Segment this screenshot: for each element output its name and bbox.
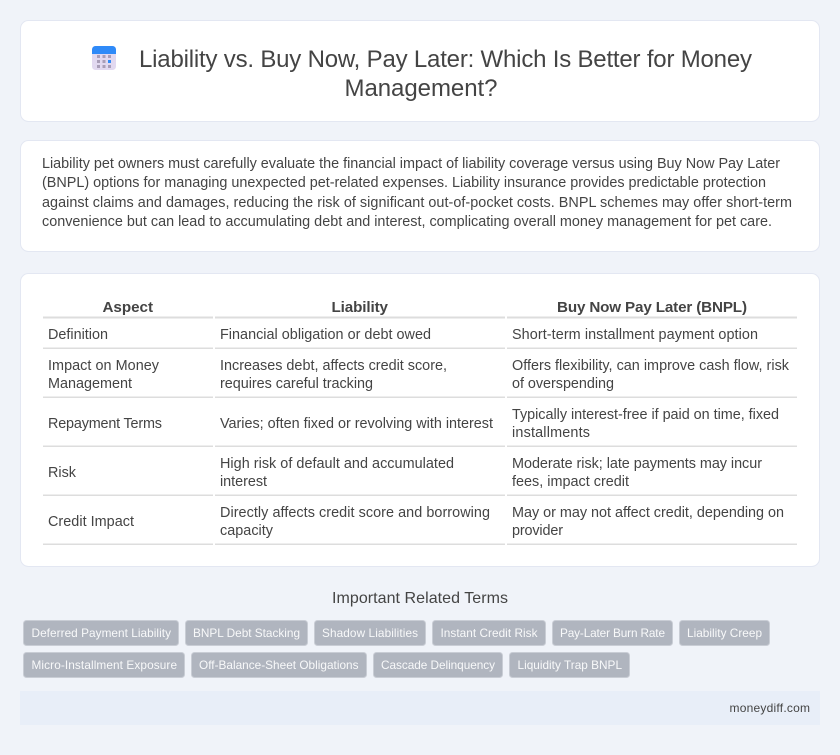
title [139, 46, 752, 102]
row: credit impact: May or may not affect credit, depending on [512, 505, 784, 521]
row: credit impact: provider [512, 523, 563, 539]
row: definition: Definition [48, 327, 108, 343]
tag: cascade delinquency [374, 652, 502, 678]
row: impact on money management: of overspending [512, 376, 614, 392]
tag: micro-installment exposure [24, 652, 184, 678]
heading: important related terms: Important Related Terms [332, 590, 508, 607]
row: repayment terms: installments [512, 425, 590, 441]
intro text block [42, 156, 792, 230]
footer [20, 691, 820, 725]
row: repayment terms: Repayment Terms [48, 416, 162, 432]
tag: bnpl debt stacking [186, 620, 308, 646]
row: definition [43, 327, 797, 349]
tag: off-balance-sheet obligations [192, 652, 366, 678]
tag: micro-installment exposure: Micro-Installment Exposure [32, 658, 177, 672]
tag: pay-later burn rate [552, 620, 672, 646]
row: risk: Moderate risk; late payments may incur [512, 456, 762, 472]
row: credit impact [43, 505, 797, 545]
row: impact on money management [43, 358, 797, 398]
tag: bnpl debt stacking: BNPL Debt Stacking [193, 626, 300, 640]
title: Management? [344, 75, 498, 102]
tag: shadow liabilities: Shadow Liabilities [322, 626, 418, 640]
tag: liability creep [680, 620, 770, 646]
row: repayment terms: Varies; often fixed or revolving with interest [220, 416, 493, 432]
row: risk [43, 456, 797, 496]
tag: liquidity trap bnpl: Liquidity Trap BNPL [518, 658, 622, 672]
tag: liability creep: Liability Creep [687, 626, 762, 640]
tag: instant credit risk [432, 620, 546, 646]
row: impact on money management: Offers flexibility, can improve cash flow, risk [512, 358, 790, 374]
panel: introduction [20, 140, 820, 252]
row: credit impact: capacity [220, 523, 274, 539]
intro text block: (BNPL) options for managing unexpected pet-related expenses. Liability insurance provides predictable protection [42, 175, 766, 191]
tag: deferred payment liability [24, 620, 178, 646]
panel: comparison table [20, 274, 820, 566]
row: repayment terms: Typically interest-free if paid on time, fixed [512, 407, 779, 423]
tag: shadow liabilities [314, 620, 426, 646]
row: impact on money management: Management [48, 376, 132, 392]
row: risk: Risk [48, 465, 77, 481]
title: Liability vs. Buy Now, Pay Later: Which Is Better for Money [139, 46, 752, 73]
row: impact on money management: Increases debt, affects credit score, [220, 358, 447, 374]
row: repayment terms [43, 407, 797, 447]
row: impact on money management: Impact on Money [48, 358, 160, 374]
row: risk: High risk of default and accumulated [220, 456, 454, 472]
tag: pay-later burn rate: Pay-Later Burn Rate [560, 626, 665, 640]
tag: cascade delinquency: Cascade Delinquency [381, 658, 495, 672]
tag: deferred payment liability: Deferred Payment Liability [32, 626, 171, 640]
intro text block: Liability pet owners must carefully evaluate the financial impact of liability coverage versus using Buy Now Pay Later [42, 156, 780, 172]
row: risk: fees, impact credit [512, 474, 629, 490]
table header row: Liability [332, 299, 389, 316]
tag: liquidity trap bnpl [510, 652, 630, 678]
row: definition: Short-term installment payment option [512, 327, 758, 343]
intro text block: convenience but can lead to accumulating debt and interest, complicating overall money management for pet care. [42, 214, 772, 230]
tag: off-balance-sheet obligations: Off-Balance-Sheet Obligations [199, 658, 359, 672]
panel: related term tags [24, 620, 770, 678]
row: risk: interest [220, 474, 267, 490]
row: credit impact: Credit Impact [48, 514, 134, 530]
table header row: Aspect [102, 299, 153, 316]
row: definition: Financial obligation or debt owed [220, 327, 431, 343]
table header row: Buy Now Pay Later (BNPL) [557, 299, 747, 316]
panel: header [20, 20, 820, 122]
row: credit impact: Directly affects credit score and borrowing [220, 505, 490, 521]
row: impact on money management: requires careful tracking [220, 376, 373, 392]
tag: instant credit risk: Instant Credit Risk [440, 626, 538, 640]
icon: calendar [92, 46, 116, 70]
intro text block: against claims and damages, reducing the risk of significant out-of-pocket costs. BNPL schemes may offer short-term [42, 195, 792, 211]
footer: moneydiff.com [730, 701, 810, 715]
table header row [43, 299, 797, 318]
